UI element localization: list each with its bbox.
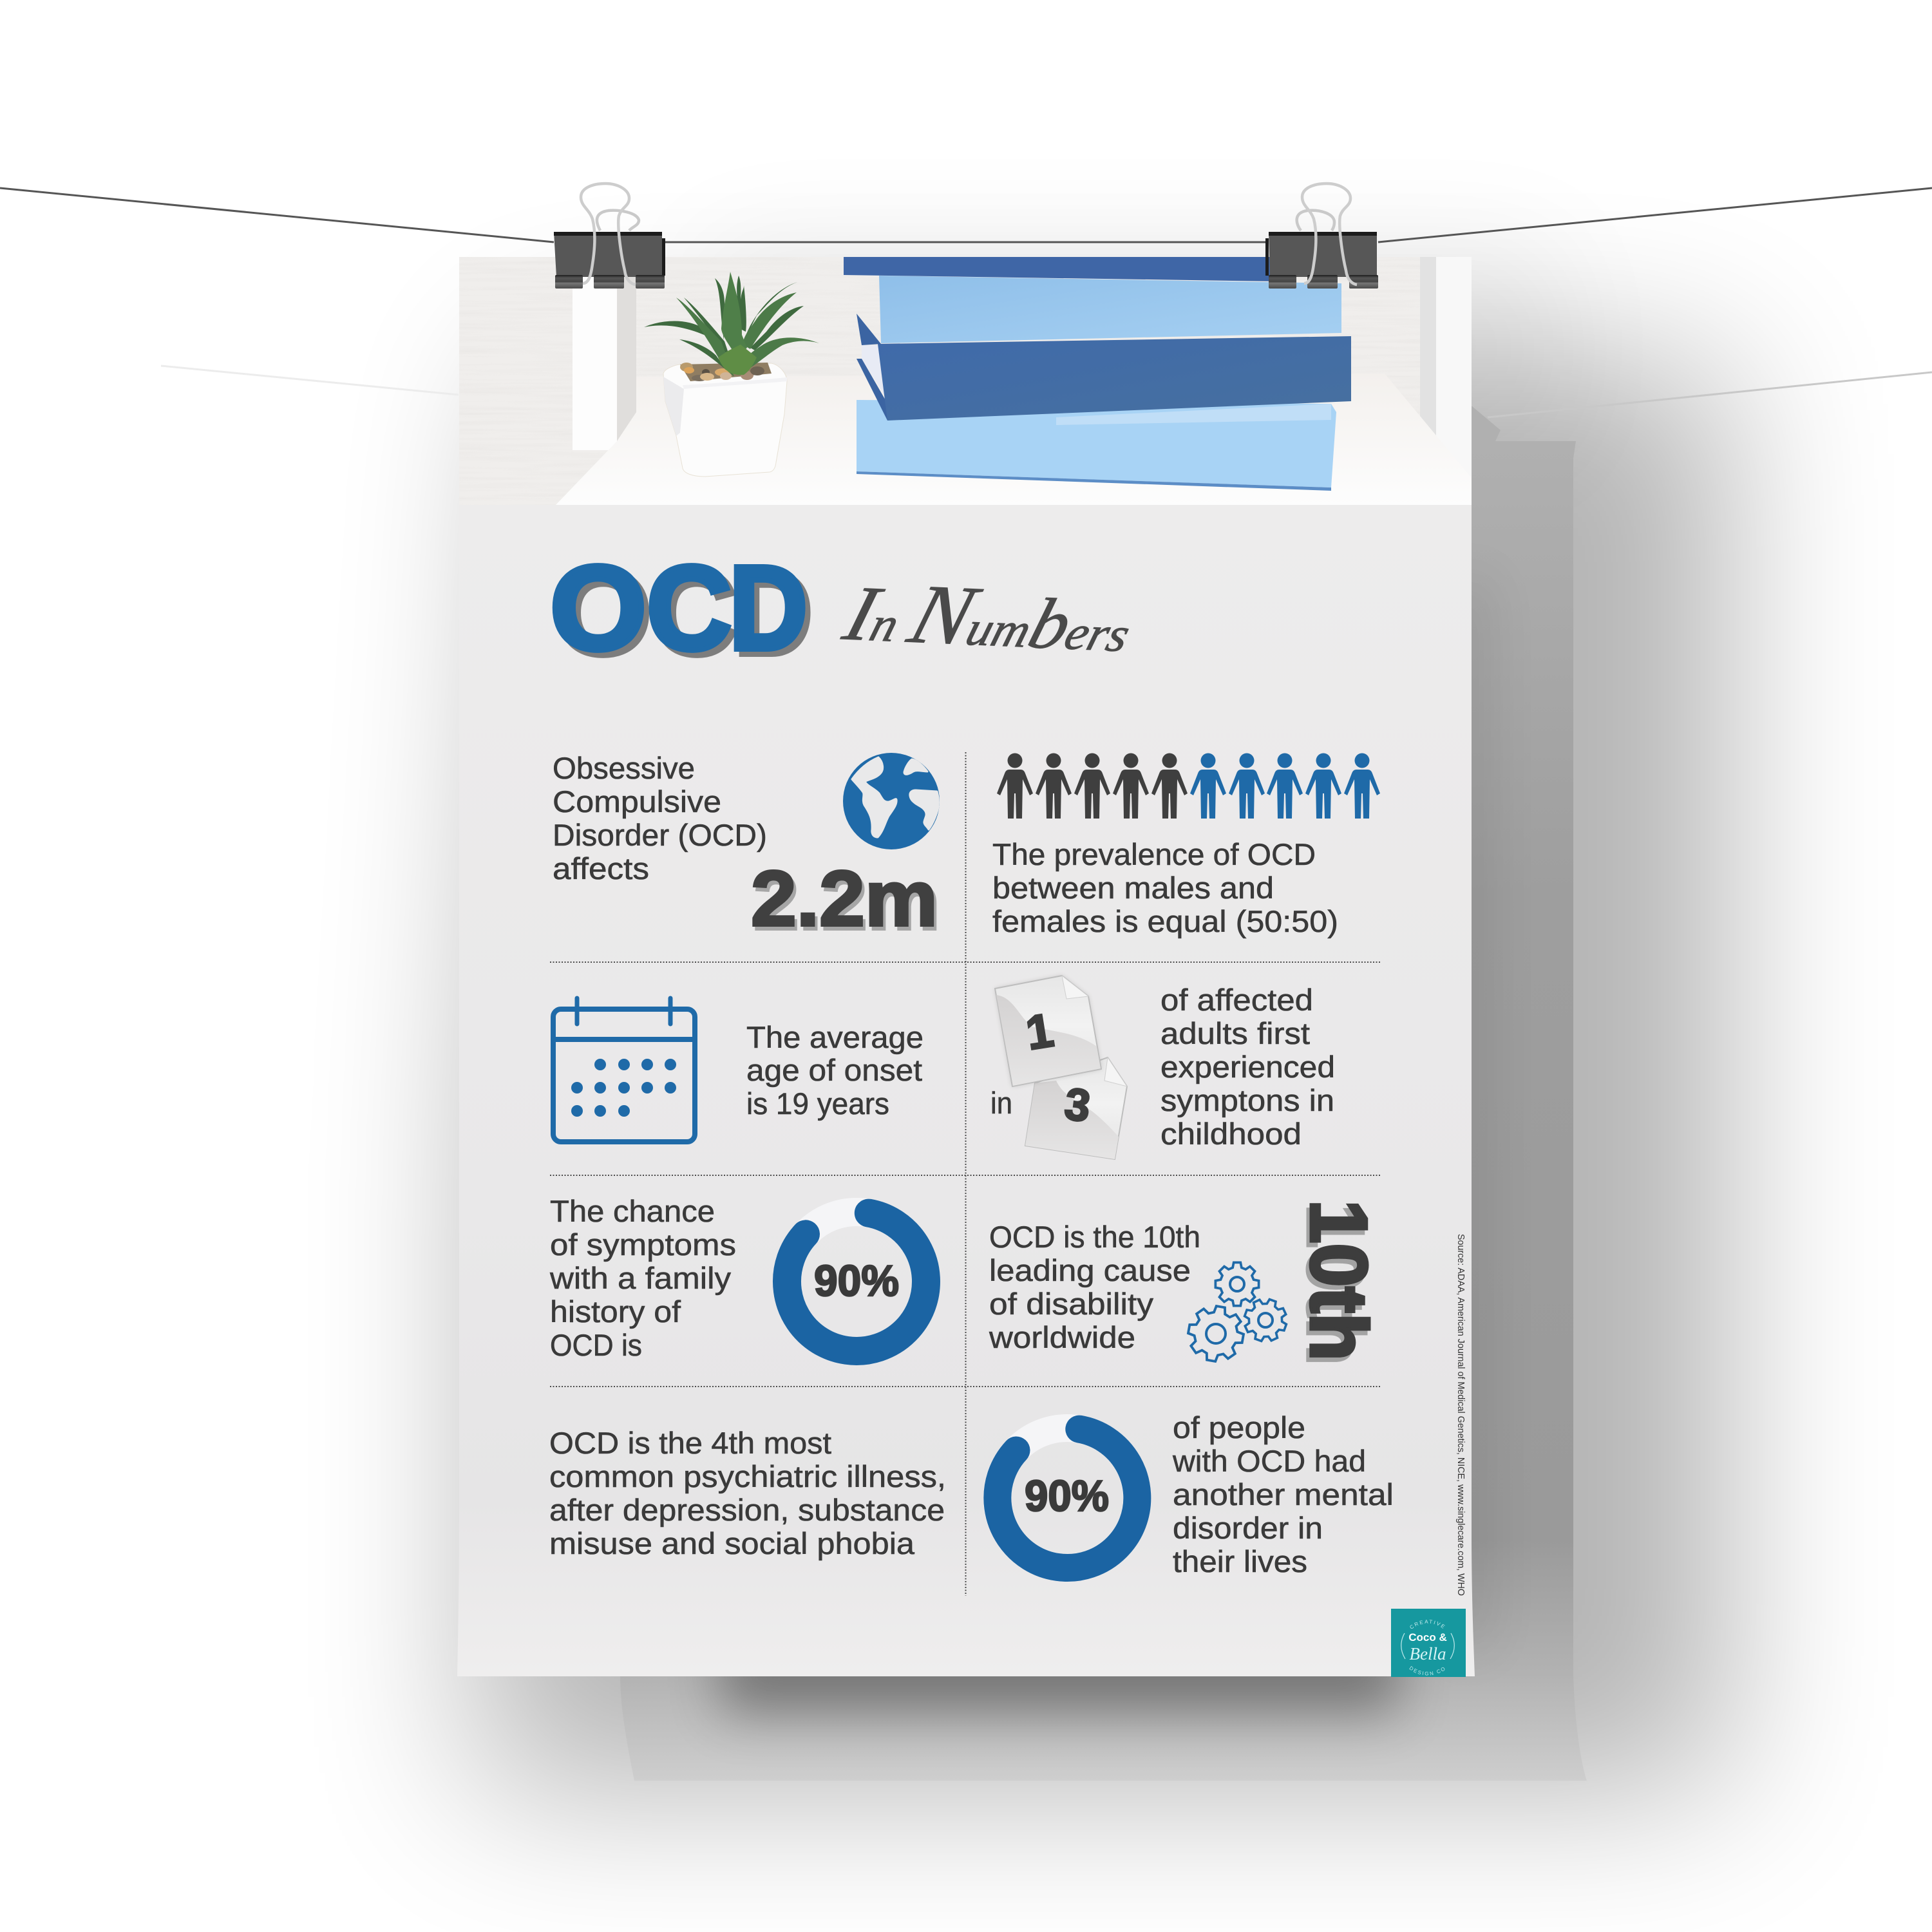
text: chance of symptoms: The chance	[550, 1194, 715, 1228]
icon: paper sheet 1	[995, 976, 1101, 1086]
binder clip right	[1265, 184, 1378, 289]
text: people with OCD: with OCD had	[1172, 1444, 1366, 1478]
panel: another mental disorder 90 percent	[997, 1410, 1394, 1578]
title OCD: C	[652, 547, 737, 680]
logo: Coco and Bella: CREATIVE	[1410, 1620, 1445, 1629]
donut chart: 90 percent	[997, 1428, 1137, 1568]
hanging wire	[0, 188, 1932, 242]
wall shadow of hanging wire, left	[161, 366, 459, 395]
icon: globe	[843, 753, 940, 849]
panel: prevalence between males and females	[992, 753, 1380, 938]
books stack	[844, 257, 1351, 491]
panel: 4th most common: after depression, substance	[549, 1493, 945, 1527]
statistic: 10th rotated: 10th	[1294, 1200, 1383, 1361]
text: prevalence: between males and	[992, 871, 1274, 905]
text: affected adults: symptons in	[1160, 1083, 1334, 1117]
panel: 1 in 3 adults	[990, 976, 1335, 1159]
text: average age	[746, 1020, 923, 1121]
title OCD: D	[734, 547, 813, 680]
aloe plant	[644, 272, 819, 377]
logo: Coco and Bella: Bella	[1410, 1644, 1446, 1663]
statistic: 2.2m: 2.2m	[751, 855, 938, 942]
text: leading cause: of disability	[989, 1287, 1154, 1321]
icon: row of ten people	[997, 753, 1380, 819]
text: obsessive compulsive disorder: Disorder (OCD)	[553, 818, 767, 852]
icon: calendar	[553, 998, 695, 1142]
icon: paper sheet 1: 1	[1023, 1003, 1057, 1060]
text: affected adults	[1160, 983, 1335, 1151]
text: average age: The average	[746, 1020, 923, 1054]
logo: Coco and Bella: DESIGN CO	[1409, 1666, 1445, 1676]
text: in: in	[990, 1086, 1012, 1120]
logo: Coco and Bella: Coco &	[1408, 1631, 1447, 1643]
text: affected adults: childhood	[1160, 1117, 1302, 1151]
title OCD: O	[550, 542, 647, 675]
binder clip left	[554, 184, 665, 289]
panel: average age of onset	[553, 998, 923, 1142]
dark book third	[857, 314, 1351, 421]
wall shadow of hanging wire, right	[1488, 372, 1932, 417]
text: leading cause: OCD is the 10th	[989, 1220, 1200, 1254]
title In Numbers: In Numbers	[835, 564, 1146, 669]
text: chance of symptoms	[549, 1194, 736, 1362]
plant pot	[663, 363, 787, 477]
text: people with OCD: disorder in	[1173, 1511, 1323, 1545]
donut chart: 90 percent	[787, 1212, 926, 1351]
text: affected adults: adults first	[1160, 1016, 1310, 1050]
text: leading cause	[989, 1220, 1200, 1354]
dark book top	[844, 257, 1278, 281]
text: leading cause: worldwide	[989, 1320, 1135, 1354]
text: chance of symptoms: of symptoms	[550, 1227, 736, 1262]
poster sheet	[457, 257, 1475, 1677]
text: prevalence: females is equal (50:50)	[992, 904, 1338, 938]
text: average age: is 19 years	[746, 1086, 889, 1121]
soil and pebbles	[680, 363, 772, 381]
text: obsessive compulsive disorder: affects	[553, 851, 649, 886]
background: soft shadows	[477, 245, 1726, 1790]
statistic: 2.2m: 2.2m	[753, 858, 940, 946]
text: average age: age of onset	[746, 1053, 922, 1087]
title OCD: C	[647, 542, 732, 675]
text: prevalence: The prevalence of OCD	[992, 837, 1316, 871]
panel: 2.2m affected	[553, 751, 940, 946]
panel: 4th most common: OCD is the 4th most	[549, 1426, 831, 1460]
cast shadow of poster	[620, 403, 1587, 1781]
text: chance of symptoms: history of	[550, 1294, 681, 1329]
text: affected adults: experienced	[1160, 1050, 1335, 1084]
text: obsessive compulsive disorder: Obsessive	[553, 751, 695, 785]
text: chance of symptoms: with a family	[549, 1261, 732, 1295]
icon: gears	[1184, 1262, 1293, 1365]
title	[550, 542, 1146, 680]
shelf surface	[556, 374, 1472, 505]
donut chart: 90 percent: 90%	[814, 1256, 899, 1305]
text: people with OCD: of people	[1173, 1410, 1305, 1444]
source text: Source: ADAA, American Journal of Medical Genetics, NICE, www.singlecare.com, WHO	[1455, 1234, 1466, 1596]
statistic: 10th rotated: 10th	[1291, 1204, 1379, 1365]
light book bottom	[857, 400, 1336, 491]
shelf post left	[573, 277, 636, 450]
header photo: shelf with plant and books	[459, 257, 1472, 505]
logo: Coco and Bella	[1391, 1609, 1466, 1677]
text: affected adults: of affected	[1160, 983, 1313, 1017]
text: people with OCD: another mental	[1173, 1477, 1394, 1511]
panel: family history 90 percent	[549, 1194, 926, 1362]
icon: paper sheet 3	[1025, 1057, 1127, 1159]
shelf post right	[1420, 257, 1472, 478]
text: obsessive compulsive disorder: Compulsive	[553, 784, 721, 819]
grid dividers	[550, 752, 1381, 1596]
text: chance of symptoms: OCD is	[550, 1328, 642, 1362]
panel: 10th leading cause	[989, 1200, 1383, 1365]
panel: 4th most common: common psychiatric illness,	[549, 1459, 946, 1493]
title OCD	[550, 542, 813, 680]
title OCD: D	[729, 542, 808, 675]
text: people with OCD	[1172, 1410, 1394, 1578]
text: obsessive compulsive disorder	[553, 751, 767, 886]
donut chart: 90 percent: 90%	[1025, 1472, 1109, 1520]
text: people with OCD: their lives	[1173, 1544, 1307, 1578]
light book second	[879, 276, 1341, 343]
title OCD: O	[555, 547, 652, 680]
text: leading cause: leading cause	[989, 1253, 1191, 1287]
text: prevalence	[992, 837, 1338, 938]
panel: 4th most common	[549, 1426, 946, 1560]
icon: paper sheet 3: 3	[1062, 1078, 1093, 1132]
panel: 4th most common: misuse and social phobia	[549, 1526, 915, 1560]
